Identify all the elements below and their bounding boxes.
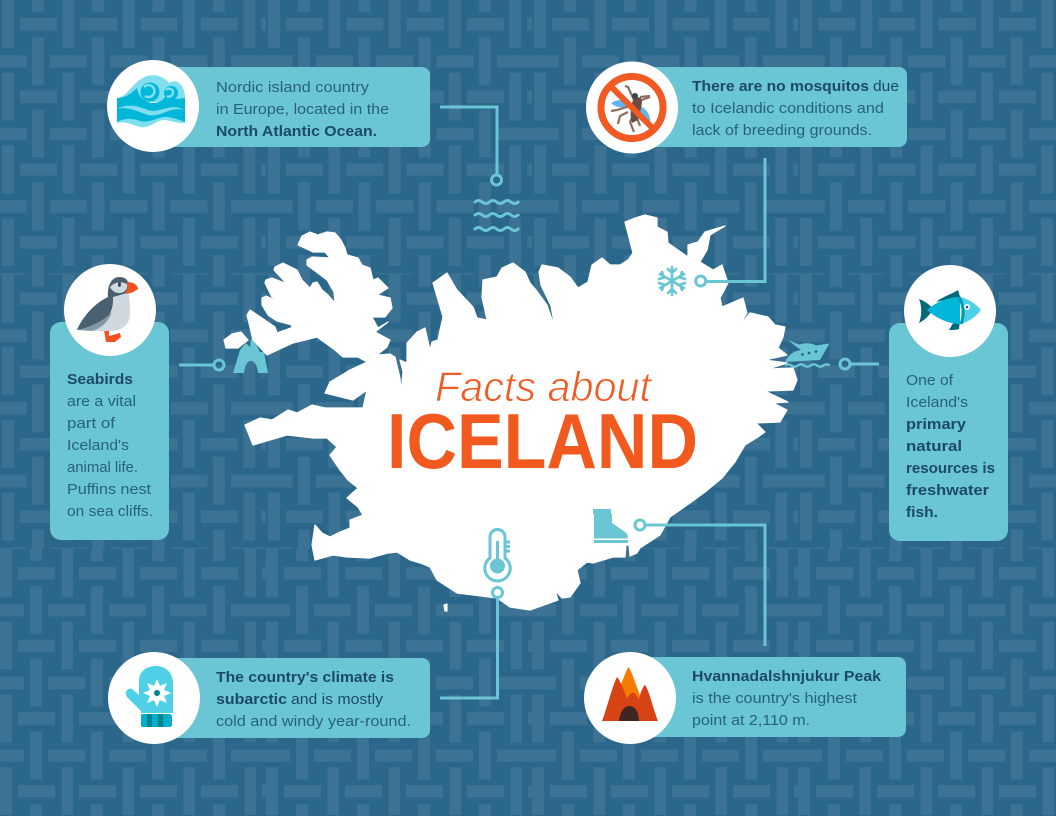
text: ocean location: in Europe, located in the xyxy=(216,101,389,118)
text: highest peak: point at 2,110 m. xyxy=(692,712,810,729)
text: climate: The country's climate is xyxy=(216,669,394,686)
text: ocean location: Nordic island country xyxy=(216,79,370,96)
text: climate: and is mostly xyxy=(291,691,384,708)
title line: ICELAND: ICELAND xyxy=(387,397,698,485)
text: seabirds: on sea cliffs. xyxy=(67,503,153,520)
icon: boat xyxy=(785,340,830,367)
text: freshwater fish: Iceland's xyxy=(906,394,968,411)
panel: no mosquitos xyxy=(586,62,907,154)
icon: mitten xyxy=(126,666,173,727)
text: seabirds: animal life. xyxy=(67,459,138,476)
icon: volcano xyxy=(602,667,658,721)
text: ocean location: North Atlantic Ocean. xyxy=(216,123,377,140)
title xyxy=(387,363,698,485)
text: no mosquitos xyxy=(692,78,899,139)
title line: Facts about: Facts about xyxy=(435,363,653,410)
text: freshwater fish: freshwater xyxy=(906,482,989,499)
connector: Atlantic ocean to waves icon xyxy=(440,107,502,185)
text: seabirds xyxy=(67,371,153,520)
text: ocean location xyxy=(216,79,389,140)
text: freshwater fish: primary xyxy=(906,416,967,433)
icon: hiking boot xyxy=(593,509,628,543)
panel: freshwater fish xyxy=(889,265,1008,541)
text: no mosquitos: There are no mosquitos xyxy=(692,78,869,95)
text: freshwater fish xyxy=(906,372,995,521)
icon: crossed-out mosquito xyxy=(601,76,663,138)
connector: seabirds to iceberg icon xyxy=(179,360,224,370)
panel: climate xyxy=(108,652,430,744)
icon: fish xyxy=(919,290,981,330)
text: climate: subarctic xyxy=(216,691,287,708)
text: freshwater fish: One of xyxy=(906,372,954,389)
panel: ocean location xyxy=(107,60,430,152)
map of Iceland xyxy=(224,215,797,611)
text: highest peak xyxy=(692,668,882,729)
text: no mosquitos: lack of breeding grounds. xyxy=(692,122,872,139)
connector: peak to boot icon xyxy=(635,520,765,646)
text: seabirds: Seabirds xyxy=(67,371,133,388)
text: seabirds: Iceland's xyxy=(67,437,129,454)
text: highest peak: is the country's highest xyxy=(692,690,858,707)
text: seabirds: are a vital xyxy=(67,393,136,410)
text: no mosquitos: to Icelandic conditions and xyxy=(692,100,884,117)
icon: snowflake xyxy=(659,267,685,295)
icon: iceberg xyxy=(233,338,268,373)
icon: ocean waves xyxy=(117,75,185,127)
panel: seabirds xyxy=(50,264,169,540)
text: freshwater fish: natural xyxy=(906,438,962,455)
icon: thermometer xyxy=(485,530,510,581)
icon: wave lines xyxy=(475,200,518,230)
icon: puffin xyxy=(77,277,138,342)
text: no mosquitos: due xyxy=(873,78,899,95)
text: freshwater fish: resources is xyxy=(906,460,995,477)
text: highest peak: Hvannadalshnjukur Peak xyxy=(692,668,882,685)
text: freshwater fish: fish. xyxy=(906,504,938,521)
text: climate: cold and windy year-round. xyxy=(216,713,411,730)
text: climate xyxy=(216,669,411,730)
panel: highest peak xyxy=(584,652,906,744)
text: seabirds: Puffins nest xyxy=(67,481,152,498)
connector: climate to thermometer icon xyxy=(440,588,502,698)
text: seabirds: part of xyxy=(67,415,116,432)
connector: mosquitos to snowflake icon xyxy=(696,158,765,286)
connector: fish to boat icon xyxy=(840,359,879,369)
